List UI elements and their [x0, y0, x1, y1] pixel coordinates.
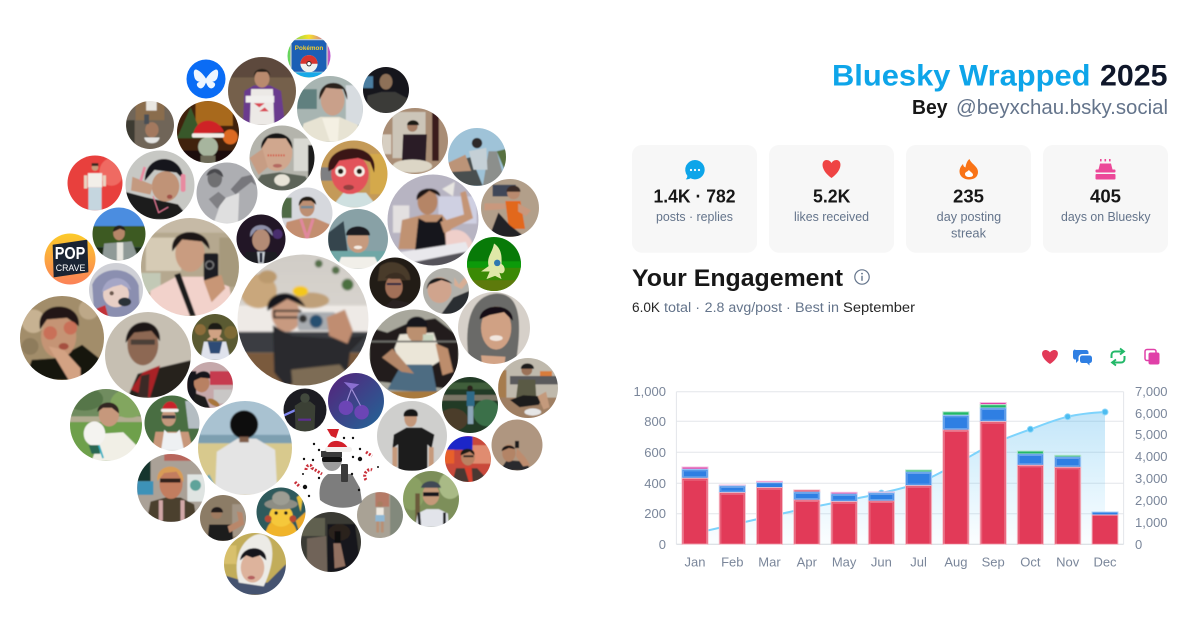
bar: Aug — [943, 412, 969, 544]
best month: September — [843, 300, 915, 316]
avatar: Pop Crave logo: POP — [55, 243, 85, 263]
legend icon: reposts — [1112, 348, 1124, 366]
avatar: Pop Crave logo — [44, 234, 96, 284]
avatar: Pokemon logo: Pokémon — [295, 45, 323, 52]
heading: Your Engagement: Your Engagement — [632, 265, 843, 292]
avatar: holding white dog — [70, 389, 142, 461]
right axis labels: 1,000 — [1135, 515, 1168, 530]
sticker: hat trim — [325, 447, 352, 452]
right axis labels: 6,000 — [1135, 406, 1168, 421]
icon: info — [855, 270, 869, 284]
right axis labels: 0 — [1135, 537, 1142, 552]
best month label: Best in — [795, 300, 839, 316]
bar: Jun — [868, 492, 894, 544]
avatar: back view at beach — [198, 401, 292, 495]
avatar: dark low-angle — [363, 67, 409, 113]
avatar: dark mirror selfie — [295, 506, 367, 578]
avatar: Pikachu with hat — [256, 488, 306, 536]
sticker: hair — [321, 451, 342, 457]
avatar: red wall full body — [68, 156, 122, 210]
sticker: phone — [341, 464, 348, 482]
month labels: Oct — [1020, 554, 1041, 570]
chart legend icons — [1042, 348, 1160, 366]
bar: Nov — [1055, 455, 1081, 545]
month labels: Jan — [685, 554, 705, 570]
bar: Jan — [682, 467, 708, 544]
avatar: suit in mirror — [382, 108, 448, 174]
legend icon: quotes — [1145, 350, 1160, 364]
avatar: santa sticker — [295, 429, 379, 508]
stat label: day posting — [937, 210, 1001, 224]
month labels: Nov — [1056, 554, 1080, 570]
panel: streak stat — [906, 145, 1031, 253]
title: year: 2025 — [1100, 60, 1168, 92]
sticker: snow dots — [302, 437, 379, 497]
right axis labels: 7,000 — [1135, 384, 1168, 399]
sticker: face — [322, 447, 342, 471]
month labels: Sep — [982, 554, 1005, 570]
avatar: upside-down selfie — [126, 101, 174, 149]
sticker: top red piece — [327, 429, 339, 438]
avatar: peace sign selfie — [126, 150, 194, 220]
stat value: 405 — [1090, 185, 1121, 206]
cumulative points — [878, 409, 1108, 496]
title — [832, 60, 1168, 92]
cumulative area fill — [695, 412, 1105, 544]
stat label: likes received — [794, 210, 869, 224]
avatar: shirtless with lei — [282, 188, 332, 238]
avatar: forest — [436, 371, 504, 439]
grid lines — [676, 392, 1124, 544]
handle: @beyxchau.bsky.social — [956, 97, 1168, 119]
avatar: cap in mirror, white tee — [361, 301, 467, 407]
bar: Apr — [794, 490, 820, 544]
bar: Jul — [906, 470, 932, 544]
avatar: anime santa hat — [177, 101, 239, 163]
avatar: peace sign 2 — [423, 268, 469, 314]
title: Bluesky Wrapped: Bluesky Wrapped — [832, 60, 1090, 92]
avatar: field and blue sky — [92, 208, 146, 260]
right axis labels — [1135, 384, 1168, 552]
avatar: orange jersey — [481, 179, 539, 237]
legend icon: replies — [1073, 350, 1092, 366]
stat value: 1.4K · 782 — [654, 185, 736, 206]
panel: avatar bubble collage — [12, 30, 564, 601]
month labels — [685, 554, 1117, 570]
sticker: santa hat — [327, 441, 349, 450]
avatar: shorts against stone wall — [352, 487, 408, 543]
avatar: dark armor — [279, 384, 331, 436]
avatar: sunglasses backpack — [397, 465, 465, 533]
left axis labels: 800 — [644, 414, 666, 429]
panel: likes stat — [769, 145, 894, 253]
month labels: Jun — [871, 554, 892, 570]
avatar: hoodie girl — [224, 533, 286, 595]
avatar: flexing mirror — [200, 495, 246, 541]
month labels: Mar — [758, 554, 781, 570]
engagement chart — [633, 384, 1168, 570]
stat value: 5.2K — [813, 185, 851, 206]
avatar: eating — [187, 362, 233, 408]
avatar: Inuyasha — [89, 263, 143, 317]
bar: Dec — [1092, 512, 1118, 544]
avatar: AM GAY shirt — [228, 57, 296, 125]
avatar: santa hat tank — [144, 396, 200, 450]
avatar: glasses close-up — [370, 258, 420, 308]
bar: Feb — [719, 485, 745, 544]
avatar: Celebi sprite — [467, 237, 521, 291]
avatar: pink round glasses — [20, 296, 104, 380]
left axis labels: 200 — [644, 506, 666, 521]
left axis labels: 1,000 — [633, 384, 666, 399]
right axis labels: 4,000 — [1135, 449, 1168, 464]
sticker: sunglasses — [322, 457, 342, 462]
avatar: road fisheye — [448, 128, 506, 186]
icon: chat bubble — [685, 160, 705, 179]
avatar: smiling man — [297, 76, 363, 142]
bar: May — [831, 492, 857, 544]
avatar: orange hair — [137, 454, 205, 522]
avatar: gray hoodie smile — [451, 285, 537, 371]
icon: heart — [823, 160, 840, 178]
left axis labels: 400 — [644, 476, 666, 491]
panel: days on Bluesky stat — [1043, 145, 1168, 253]
month labels: Jul — [910, 554, 927, 570]
bar: Mar — [756, 481, 782, 544]
avatar: bed selfie with phone (large) — [238, 254, 368, 386]
stat value: 235 — [953, 185, 984, 206]
month labels: Feb — [721, 554, 744, 570]
month labels: Aug — [944, 554, 967, 570]
right axis labels: 3,000 — [1135, 471, 1168, 486]
cumulative line — [695, 412, 1105, 533]
panel: posts and replies stat — [632, 145, 757, 253]
avatar: red shirt suit — [105, 312, 191, 398]
avatar: Bluesky logo — [186, 60, 226, 98]
stat label: posts · replies — [656, 210, 733, 224]
bar: Oct — [1017, 451, 1043, 545]
avatar: cap smiling — [328, 209, 388, 269]
left axis labels: 600 — [644, 445, 666, 460]
right axis labels: 2,000 — [1135, 493, 1168, 508]
right axis labels: 5,000 — [1135, 427, 1168, 442]
avatar: black tee — [370, 394, 454, 478]
engagement summary — [632, 300, 915, 316]
legend icon: likes heart — [1042, 350, 1058, 364]
month labels: Apr — [797, 554, 818, 570]
icon: flame — [960, 159, 978, 180]
sticker: grayscale body — [319, 474, 362, 508]
display name: Bey — [912, 97, 948, 119]
avatar: neon city — [440, 431, 496, 487]
avatar: Pop Crave logo: CRAVE — [56, 263, 85, 273]
avatar: Pokemon logo — [288, 34, 330, 78]
icon: cake — [1096, 159, 1116, 180]
left axis labels — [633, 384, 666, 552]
sticker: candy canes — [295, 452, 372, 487]
total label: total · — [664, 300, 700, 316]
avatar: black tank top — [388, 174, 478, 266]
user name and handle — [912, 97, 1168, 119]
avatar: hands on cheeks, flowers — [192, 314, 238, 360]
total value: 6.0K — [632, 300, 661, 316]
avatar: beige wall — [486, 414, 548, 476]
left axis labels: 0 — [659, 537, 666, 552]
stat label: days on Bluesky — [1061, 210, 1151, 224]
average per post: 2.8 avg/post · — [705, 300, 791, 316]
month labels: Dec — [1093, 554, 1117, 570]
bar: Sep — [980, 402, 1006, 544]
avatar: sitting on floor — [492, 352, 564, 424]
avatar: old man in suit — [236, 214, 286, 264]
avatar: face with dots — [250, 126, 314, 190]
avatar: red-faced anime — [320, 140, 388, 208]
stat label second line: streak — [951, 226, 987, 240]
avatar: cherries — [322, 367, 390, 435]
avatar: grayscale flexing — [196, 162, 258, 224]
month labels: May — [832, 554, 857, 570]
avatar: pink shirt mirror selfie — [141, 218, 239, 316]
